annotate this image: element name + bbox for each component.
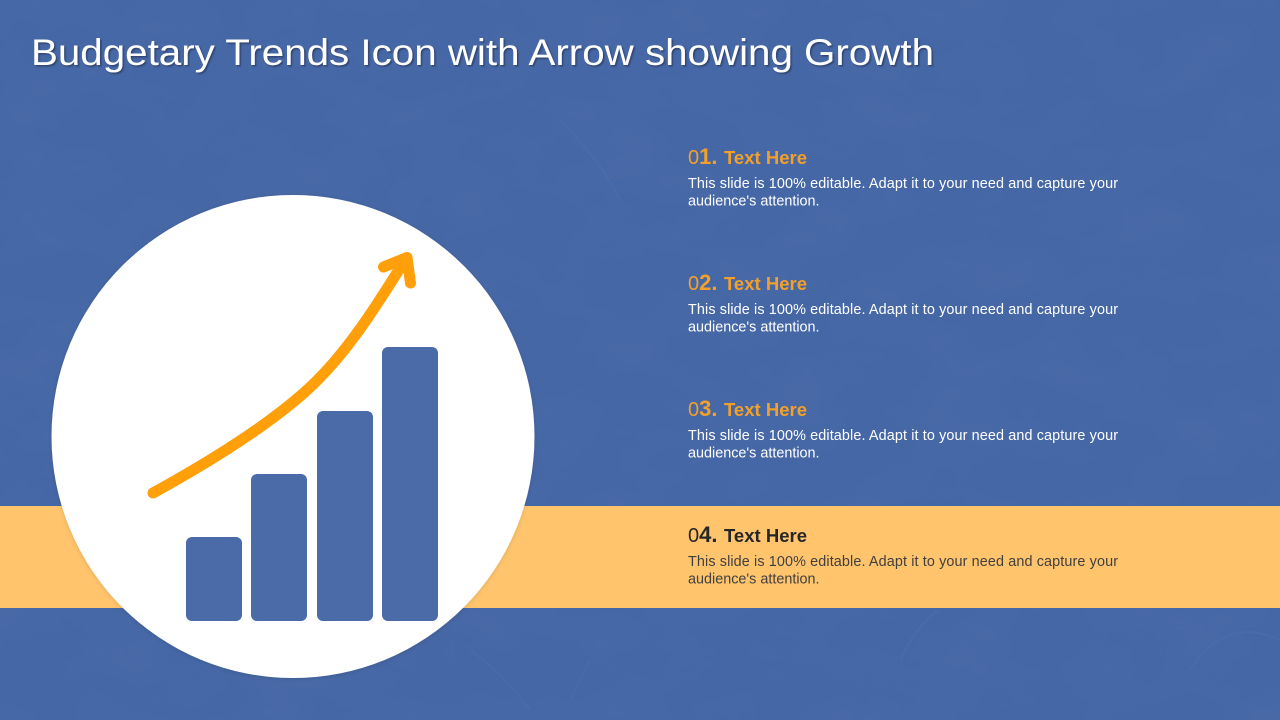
heading 02: 02.	[688, 270, 717, 295]
body 02: This slide is 100% editable. Adapt it to your need and capture your	[688, 302, 1118, 318]
heading 04: Text Here	[724, 526, 807, 546]
panel: chart icon circle	[52, 195, 534, 678]
bar chart	[186, 347, 438, 621]
body 04: audience's attention.	[688, 572, 820, 588]
body 03: audience's attention.	[688, 446, 820, 462]
text block: item 04	[688, 522, 1118, 588]
heading 02: Text Here	[724, 274, 807, 294]
white circle	[52, 195, 534, 678]
heading 01: 01.	[688, 144, 717, 169]
heading 01: Text Here	[724, 148, 807, 168]
body 02: audience's attention.	[688, 320, 820, 336]
heading 03: 03.	[688, 396, 717, 421]
text block: item 02	[688, 270, 1118, 336]
title: Budgetary Trends Icon with Arrow showing Growth	[31, 32, 934, 73]
body 01: audience's attention.	[688, 194, 820, 210]
text block: item 01	[688, 144, 1118, 210]
body 01: This slide is 100% editable. Adapt it to your need and capture your	[688, 176, 1118, 192]
highlight band	[0, 506, 1280, 608]
body 04: This slide is 100% editable. Adapt it to your need and capture your	[688, 554, 1118, 570]
heading 03: Text Here	[724, 400, 807, 420]
heading 04: 04.	[688, 522, 717, 547]
body 03: This slide is 100% editable. Adapt it to your need and capture your	[688, 428, 1118, 444]
arrow: growth	[153, 258, 410, 493]
text block: item 03	[688, 396, 1118, 462]
